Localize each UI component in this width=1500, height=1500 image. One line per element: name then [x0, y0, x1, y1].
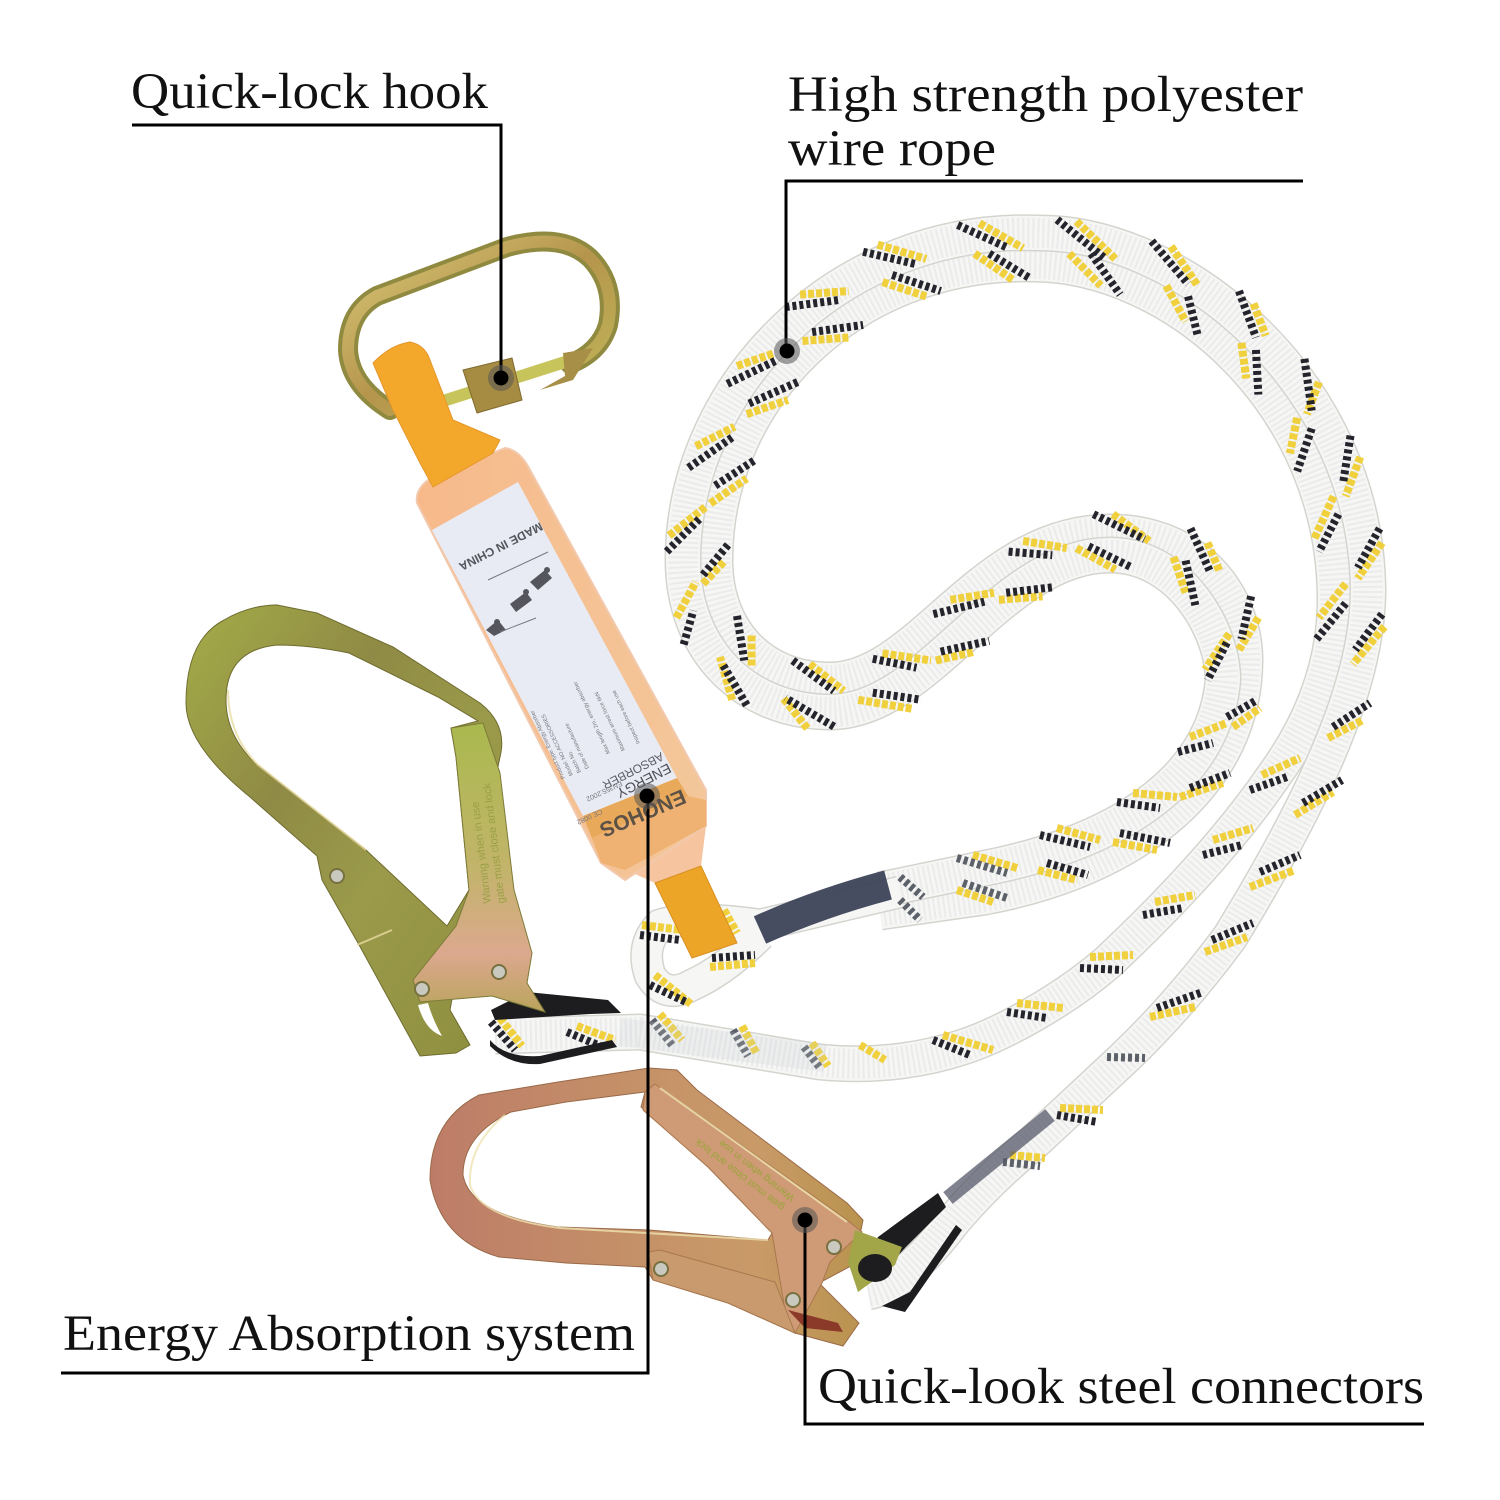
hook lever gate	[413, 723, 545, 1012]
energy absorber	[373, 342, 737, 958]
callout: energy absorption	[61, 783, 660, 1373]
bottom webbing loop	[655, 866, 737, 958]
hook rivets	[654, 1240, 841, 1307]
marker dot	[634, 783, 660, 809]
carabiner tip	[540, 348, 593, 390]
marker dot	[792, 1207, 818, 1233]
rope: eye loop around webbing	[647, 892, 900, 991]
absorber small spec lines: Date of manufacture	[564, 722, 591, 770]
heading: Quick-look steel connectors	[818, 1359, 1424, 1415]
marker dot	[774, 338, 800, 364]
thimble: bottom hook	[862, 1193, 962, 1312]
absorber title: CE 0082	[575, 807, 603, 825]
absorber small spec lines: Product type: Energy Absorber	[530, 709, 567, 780]
rope assembly	[491, 220, 1384, 1292]
absorber woven end	[592, 796, 706, 870]
carabiner lock sleeve	[463, 358, 522, 413]
absorber small spec lines	[530, 680, 642, 780]
rope splice: clear sleeve near left hook	[620, 1032, 825, 1058]
hook lever gate	[643, 1084, 862, 1333]
hook engraved warning: gate must close and lock	[693, 1135, 787, 1212]
hook slot	[418, 1003, 442, 1036]
callout: quick-lock hook	[131, 64, 514, 391]
absorber taper to bottom webbing	[617, 826, 706, 883]
heading: wire rope	[788, 121, 996, 177]
leader line	[132, 125, 501, 378]
absorber sleeve	[417, 448, 706, 880]
rope: yellow and black bands lower section	[491, 700, 1370, 1166]
absorber small spec lines: Max length 2m, energy absorber	[573, 680, 612, 755]
absorber label	[432, 482, 677, 816]
absorber title: ENERGY	[613, 760, 674, 802]
leader line	[61, 795, 648, 1373]
hook highlights	[228, 690, 392, 945]
hook lower lever plate	[648, 1250, 795, 1333]
rope splice: dark tape near bottom hook	[948, 1115, 1050, 1198]
leader line	[786, 181, 1303, 351]
absorber small spec lines: Batch No.	[567, 749, 583, 774]
absorber title: EN355:2002	[585, 779, 623, 802]
rope: yellow and black bands upper loops	[667, 220, 1384, 728]
top carabiner	[348, 242, 610, 413]
heading: Quick-lock hook	[131, 64, 489, 120]
hook body	[430, 1068, 863, 1346]
thimble: left hook	[490, 992, 621, 1064]
marker dot	[488, 365, 514, 391]
leader line	[805, 1220, 1424, 1424]
absorber made in china: MADE IN CHINA	[456, 519, 545, 574]
hook rivets	[330, 869, 506, 996]
absorber title	[575, 749, 674, 825]
carabiner gate	[440, 362, 565, 402]
absorber orange brand band	[583, 778, 688, 838]
absorber title: ABSORBER	[600, 749, 666, 792]
hook engraved warning: Warning when in use	[470, 801, 494, 904]
hook highlight	[470, 1088, 847, 1240]
hook engraved warning	[470, 782, 508, 904]
bottom snap hook	[430, 1068, 902, 1346]
heading: High strength polyester	[788, 67, 1303, 123]
hook engraved warning: Warning when in use	[716, 1137, 797, 1203]
absorber fall clearance figures	[486, 552, 552, 636]
callout: high strength rope	[774, 67, 1303, 364]
callout: steel connectors	[792, 1207, 1424, 1424]
absorber small spec lines: Inspect before each use	[612, 689, 642, 745]
rope splice: dark tape near energy absorber	[760, 885, 888, 930]
rope: strand from bottom hook	[683, 233, 1368, 1292]
top webbing loop	[373, 342, 500, 487]
hook engraved warning: gate must close and lock	[481, 782, 508, 904]
absorber small spec lines: Maximum arrest force 6kN	[594, 691, 627, 752]
hook swivel collar	[848, 1230, 902, 1292]
heading: Energy Absorption system	[63, 1306, 635, 1362]
carabiner frame	[348, 242, 610, 410]
left snap hook	[186, 605, 545, 1056]
heading	[788, 67, 1303, 177]
absorber small spec lines: Model: NO.ACCESSORIES	[541, 713, 575, 777]
hook body	[186, 605, 502, 1056]
hook slot	[788, 1310, 843, 1332]
rope: strand from left hook	[495, 264, 1335, 1064]
absorber brand: ENOHOS	[596, 784, 689, 841]
